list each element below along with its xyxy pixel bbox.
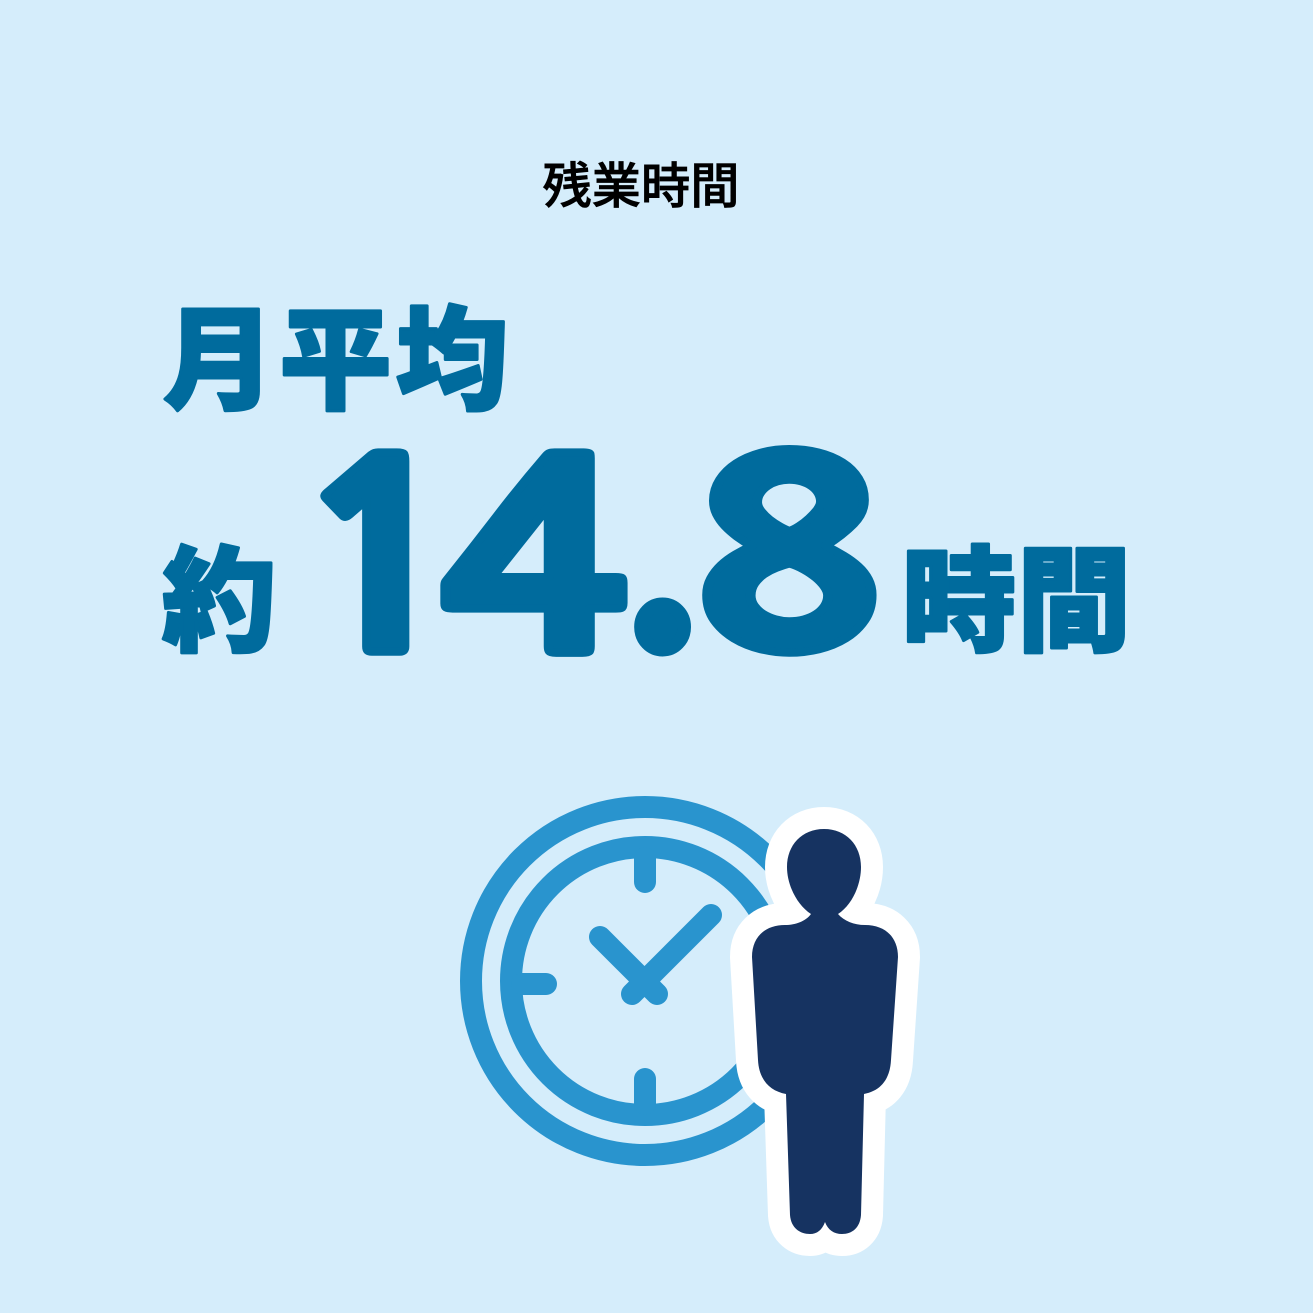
title: 残業時間 <box>542 160 740 214</box>
heading: monthly average: 月平均 <box>163 299 508 424</box>
number: 14.8: . <box>624 416 698 666</box>
unit: hours: 時間 <box>902 540 1131 667</box>
value row: about 14.8 hours <box>162 416 1131 689</box>
icon: person <box>752 829 898 1234</box>
number: 14.8: 4 <box>438 432 629 689</box>
number: 14.8: 8 <box>695 432 882 682</box>
number: 14.8 <box>295 416 882 689</box>
icon: clock and person <box>471 807 898 1234</box>
prefix: about: 約 <box>162 540 276 667</box>
icon: clock <box>471 807 819 1155</box>
number: 14.8: 1 <box>295 432 465 689</box>
